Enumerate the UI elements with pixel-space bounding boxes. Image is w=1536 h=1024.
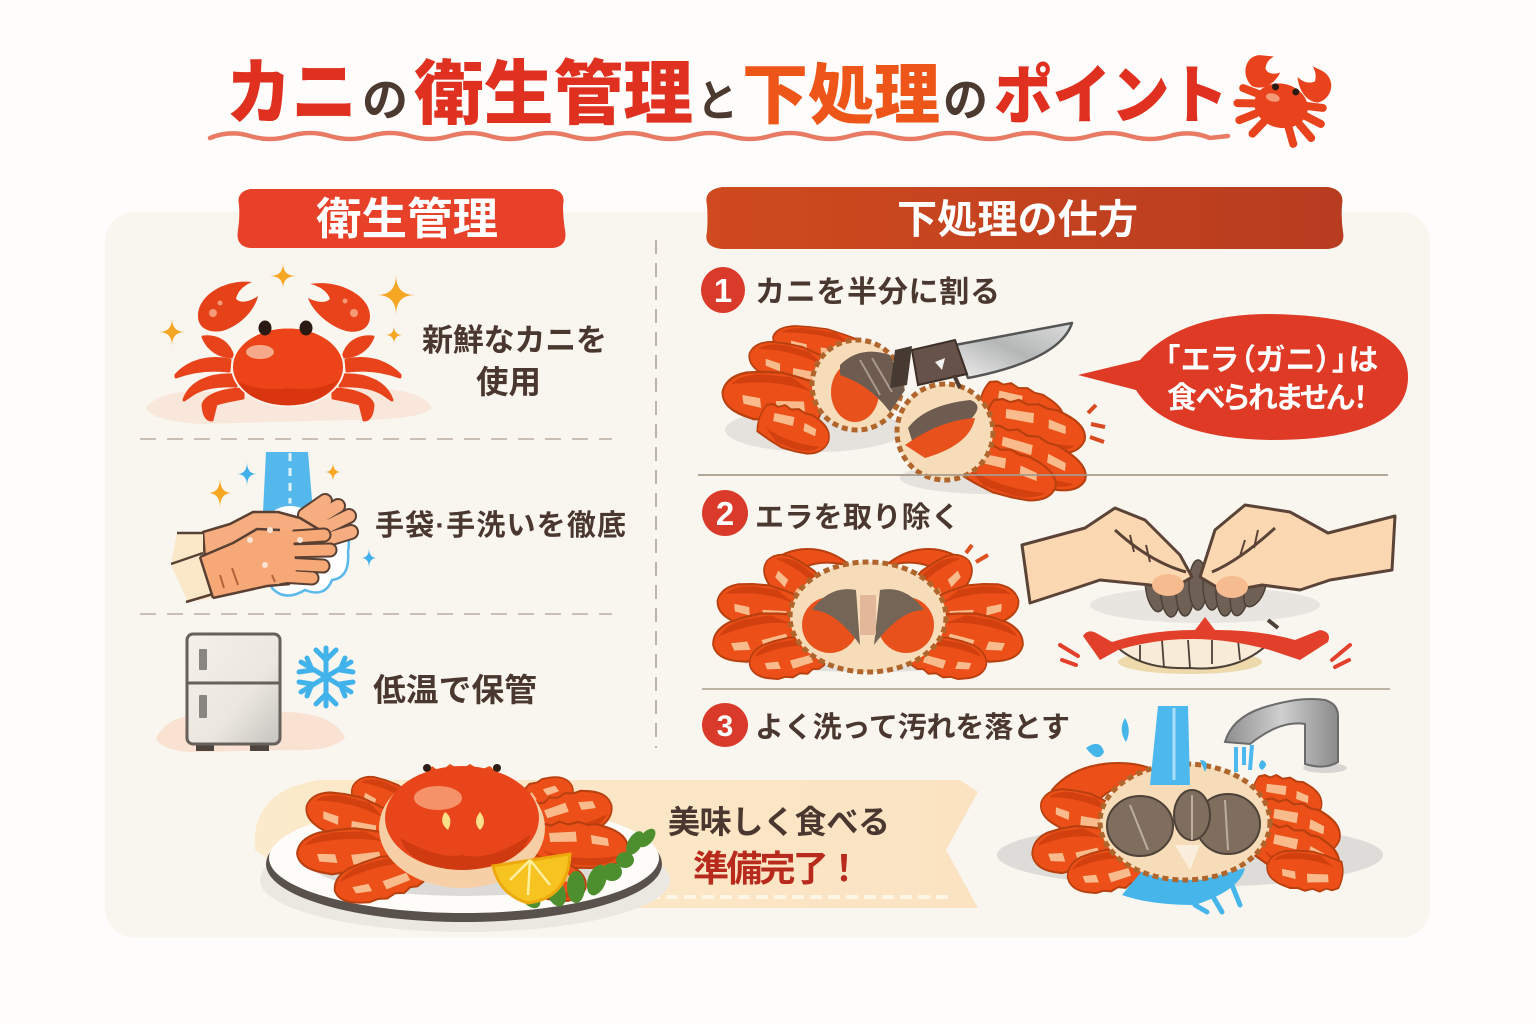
step number 2 — [702, 490, 748, 536]
title: 下処理 — [742, 58, 940, 132]
title: と — [697, 77, 738, 126]
callout: gills cannot be eaten — [1078, 314, 1408, 440]
callout: gills cannot be eaten: 「エラ（ガニ）」は — [1165, 344, 1378, 377]
text: gloves and hand washing: 手袋·手洗いを徹底 — [375, 509, 626, 542]
step number 2: 2 — [716, 495, 734, 532]
title: ポイント — [994, 60, 1228, 132]
step number 1 — [701, 267, 745, 313]
divider: step 1 — [698, 474, 1388, 476]
illustration: opened crab — [709, 544, 1027, 684]
text: store at low temperature: 低温で保管 — [373, 672, 537, 708]
icon: lemon and herbs — [493, 826, 659, 912]
text: ready to eat deliciously — [668, 804, 890, 889]
column divider — [655, 240, 657, 748]
icon: washing hands — [171, 452, 351, 602]
text: remove gills: エラを取り除く — [755, 501, 960, 534]
illustration: crab on plate — [260, 764, 670, 932]
title: カニ — [226, 54, 357, 134]
title: の — [943, 74, 988, 126]
text: use fresh crab: 使用 — [476, 364, 541, 400]
icon: refrigerator — [156, 634, 345, 752]
callout: gills cannot be eaten: 食べられません！ — [1167, 382, 1368, 415]
heading: hygiene management — [238, 189, 566, 248]
motion marks — [1088, 405, 1105, 442]
text: ready to eat deliciously: 美味しく食べる — [668, 804, 890, 840]
item: hand washing — [171, 452, 626, 602]
step number 3: 3 — [717, 710, 733, 743]
step 1 — [701, 267, 1408, 510]
icon: knife — [890, 323, 1072, 388]
motion marks — [966, 545, 988, 562]
icon: faucet — [1225, 699, 1347, 773]
heading: preparation — [706, 187, 1343, 249]
icon: fresh crab — [146, 282, 432, 424]
illustration: hands pulling gills — [1022, 505, 1395, 647]
title: 衛生管理 — [414, 55, 693, 133]
text: ready to eat deliciously: 準備完了！ — [693, 848, 862, 889]
banner: ready to eat — [255, 764, 978, 932]
icon: snowflake — [299, 648, 353, 706]
heading: preparation: 下処理の仕方 — [897, 198, 1138, 242]
icon: small title crab — [1231, 51, 1335, 149]
illustration: crab halves — [720, 320, 1094, 510]
heading: hygiene management: 衛生管理 — [316, 195, 498, 244]
divider: step 2 — [702, 688, 1390, 690]
main panel background — [105, 212, 1430, 938]
sparkles — [208, 462, 377, 568]
text: use fresh crab — [422, 323, 607, 400]
title — [226, 54, 1228, 134]
wavy title underline — [210, 133, 1228, 139]
step 3 — [702, 699, 1383, 912]
title: の — [362, 74, 408, 126]
step number 1: 1 — [714, 272, 732, 309]
step 2 — [702, 490, 1395, 684]
icon: running water — [1086, 706, 1266, 785]
illustration: crab being rinsed — [997, 763, 1383, 912]
item: fresh crab — [146, 263, 607, 424]
text: split crab in half: カニを半分に割る — [755, 276, 1000, 309]
item: cold storage — [156, 634, 537, 752]
sparkles — [159, 263, 415, 346]
illustration: removed shell and gills — [1060, 617, 1350, 674]
step number 3 — [702, 703, 748, 747]
text: use fresh crab: 新鮮なカニを — [422, 323, 607, 358]
text: wash off dirt: よく洗って汚れを落とす — [755, 711, 1070, 744]
